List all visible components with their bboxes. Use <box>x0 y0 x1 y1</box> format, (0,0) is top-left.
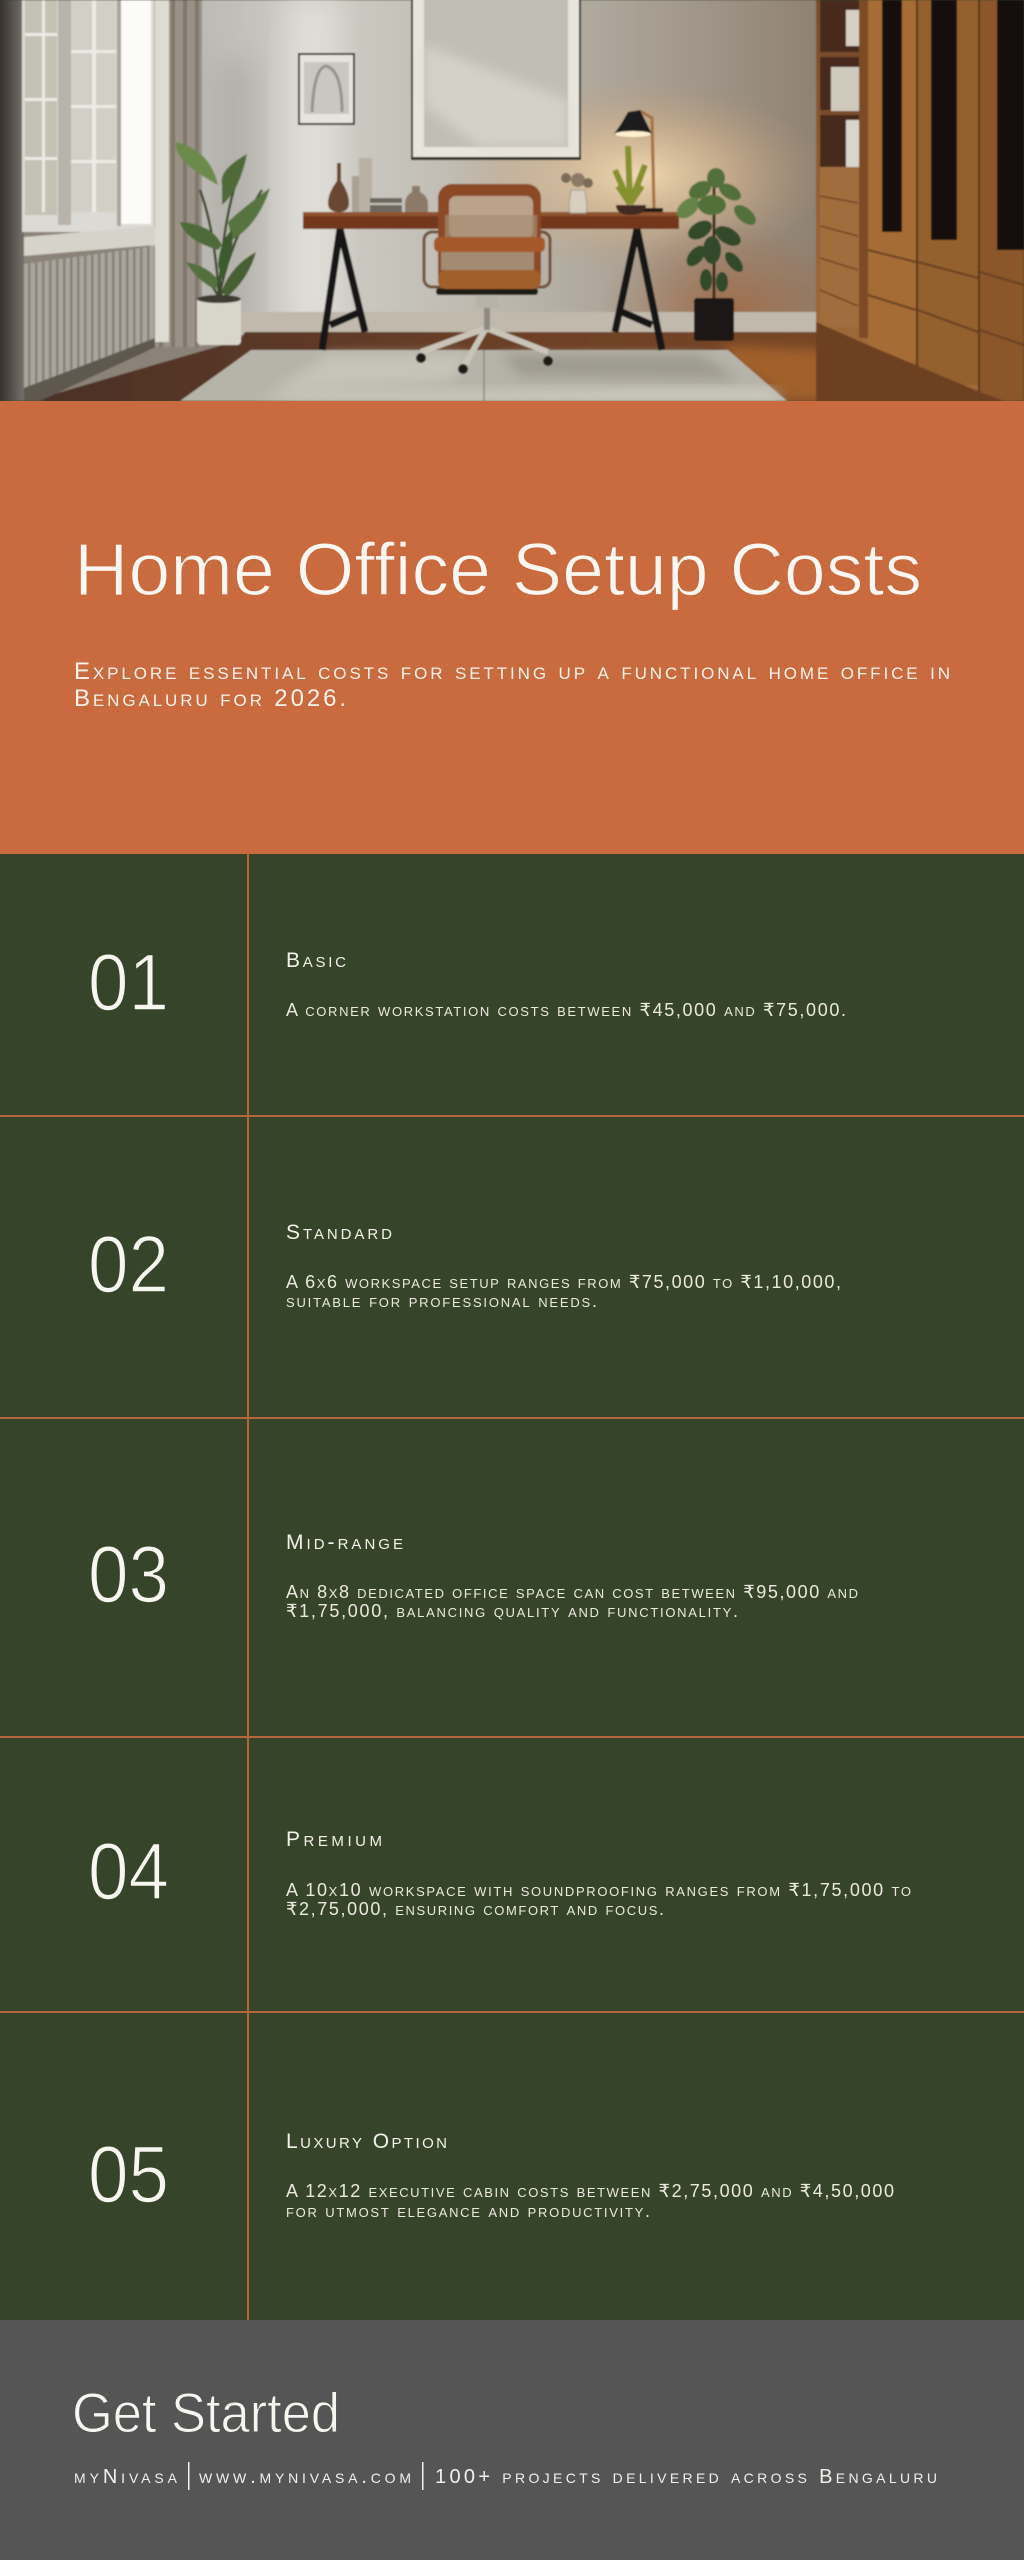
right floor plant <box>673 168 759 341</box>
row 02: Standard: Standard <box>286 1221 392 1244</box>
wall <box>150 0 830 335</box>
panel: title band <box>0 401 1024 854</box>
row 03: Mid-range: Mid-range <box>286 1531 403 1554</box>
wall light and shadow <box>217 0 816 312</box>
desk objects <box>328 158 428 212</box>
row 02: Standard: suitable for professional needs. <box>286 1291 597 1311</box>
row 05: Luxury Option <box>88 2130 894 2221</box>
window sill <box>24 226 155 256</box>
window post <box>0 0 24 401</box>
row 05: Luxury Option: Luxury Option <box>286 2130 447 2153</box>
flower vase <box>561 173 593 213</box>
floor sunlight <box>720 340 816 401</box>
subtitle: Bengaluru for 2026. <box>74 685 346 712</box>
row 03: Mid-range <box>88 1530 858 1621</box>
footer contact line: myNivasa <box>74 2466 178 2488</box>
office chair <box>416 184 553 374</box>
baseboard <box>240 312 820 332</box>
footer contact line: 100+ projects delivered across Bengaluru <box>435 2466 937 2488</box>
footer contact line: www.mynivasa.com <box>199 2466 411 2488</box>
row 01: Basic <box>88 938 846 1028</box>
hero photo: home office illustration <box>0 0 1024 408</box>
desk <box>303 212 679 350</box>
large poster <box>411 0 581 160</box>
row 01: Basic: A corner workstation costs between ₹45,000 and ₹75,000. <box>286 1000 846 1020</box>
row 04: Premium: 04 <box>88 1827 169 1917</box>
panel: footer <box>0 2320 1024 2560</box>
rug <box>180 350 787 401</box>
row 05: Luxury Option: 05 <box>88 2130 169 2220</box>
subtitle <box>74 658 950 712</box>
row 03: Mid-range: An 8x8 dedicated office space can cost between ₹95,000 and <box>286 1582 858 1602</box>
row 02: Standard: A 6x6 workspace setup ranges from ₹75,000 to ₹1,10,000, <box>286 1272 841 1292</box>
wooden cabinet <box>816 0 1024 408</box>
potted desk plant <box>615 146 646 215</box>
row 04: Premium: A 10x10 workspace with soundproofing ranges from ₹1,75,000 to <box>286 1880 911 1900</box>
row 04: Premium: ₹2,75,000, ensuring comfort and focus. <box>286 1899 664 1919</box>
window <box>22 0 154 232</box>
curtain <box>155 0 202 347</box>
row 03: Mid-range: ₹1,75,000, balancing quality and functionality. <box>286 1601 738 1621</box>
row 02: Standard <box>88 1220 841 1311</box>
row 01: Basic: Basic <box>286 949 346 972</box>
row 03: Mid-range: 03 <box>88 1530 169 1620</box>
footer contact line <box>74 2462 937 2490</box>
floor <box>40 330 817 401</box>
row 05: Luxury Option: for utmost elegance and productivity. <box>286 2201 650 2221</box>
radiator <box>24 246 155 388</box>
left floor plant <box>176 142 270 345</box>
subtitle: Explore essential costs for setting up a functional home office in <box>74 658 950 685</box>
row 04: Premium <box>88 1827 911 1919</box>
panel: cost tiers <box>0 854 1024 2320</box>
row 04: Premium: Premium <box>286 1828 382 1851</box>
wall under window <box>24 338 160 401</box>
row 01: Basic: 01 <box>88 938 169 1028</box>
small framed art <box>298 53 355 125</box>
table lamp <box>614 110 663 212</box>
footer heading: Get Started <box>72 2381 340 2444</box>
title: Home Office Setup Costs <box>74 528 922 611</box>
row 05: Luxury Option: A 12x12 executive cabin costs between ₹2,75,000 and ₹4,50,000 <box>286 2181 894 2201</box>
row 02: Standard: 02 <box>88 1220 169 1310</box>
